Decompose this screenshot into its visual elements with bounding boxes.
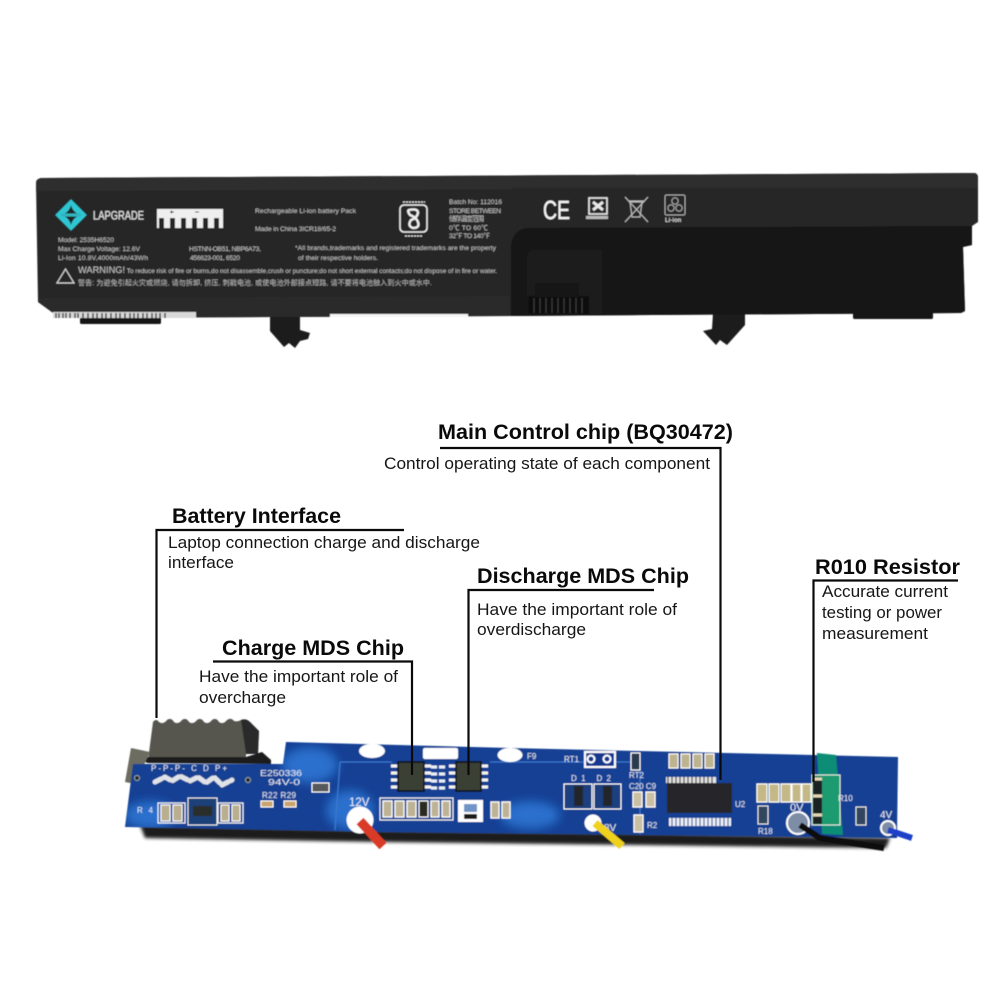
battery pack icon — [157, 209, 223, 228]
capacitor labels: C20 C9 — [629, 782, 657, 791]
storage fahrenheit: 32℉ TO 140℉ — [449, 232, 490, 240]
RT1 pad — [585, 752, 615, 767]
leader line — [468, 590, 654, 775]
RT2 part — [631, 753, 640, 770]
recycling icon — [665, 195, 685, 215]
heading: Charge MDS Chip — [222, 636, 404, 660]
D2 diode — [594, 784, 621, 809]
connector side recess — [241, 719, 259, 754]
description line 3: measurement — [822, 624, 928, 643]
pin labels: P-P-P- C D P+ — [151, 764, 227, 773]
model: Model: 2535H6520 — [58, 237, 114, 244]
R18 resistor — [758, 806, 768, 824]
batch info: Batch No: 112016 — [449, 199, 502, 206]
barcode lines — [56, 313, 165, 318]
label content — [56, 195, 685, 287]
black wire — [800, 825, 884, 848]
U2 main chip — [666, 777, 732, 826]
description: Control operating state of each component — [384, 454, 710, 473]
trace panel — [335, 762, 640, 834]
battery body — [36, 173, 978, 318]
leader line — [156, 530, 404, 718]
resistor R1 — [856, 807, 866, 825]
leader line — [440, 448, 720, 780]
callout: charge chip — [199, 636, 412, 775]
circuit board photo — [124, 719, 912, 848]
origin: Made in China 3ICR18/65-2 — [255, 226, 336, 233]
12V label: 12V — [349, 797, 370, 809]
upper textured band — [36, 173, 978, 191]
board shadow — [140, 825, 890, 848]
tan SMD parts — [261, 783, 329, 807]
component box under chips — [380, 798, 453, 820]
4V pad — [881, 821, 895, 835]
board holes top — [359, 744, 522, 762]
yellow wire — [595, 823, 622, 846]
green resistor stripe — [817, 753, 843, 835]
white strip — [330, 314, 468, 317]
product name: Rechargeable Li-ion battery Pack — [255, 208, 357, 215]
connector pins — [528, 283, 589, 314]
R18 label: R18 — [758, 827, 773, 836]
small component boxes left — [158, 803, 243, 823]
CE mark: CE — [543, 195, 570, 225]
left marking blocks: R4 — [137, 806, 154, 815]
marking R22 R29: R22 R29 — [262, 791, 297, 800]
description: Have the important role of — [199, 667, 398, 686]
component row under chips — [383, 801, 510, 818]
blue wire — [888, 830, 912, 838]
D1 diode — [564, 784, 592, 809]
storage heading: STORE BETWEEN — [449, 208, 501, 215]
U2 label: U2 — [735, 800, 746, 809]
board marking 2: 94V-0 — [268, 778, 301, 787]
8V label: 8V — [604, 823, 617, 834]
trademark notice: *All brands,trademarks and registered trademarks are the property — [295, 245, 497, 252]
heading: Main Control chip (BQ30472) — [438, 420, 733, 444]
R2 label: R2 — [647, 821, 658, 830]
0V pad — [787, 812, 809, 834]
storage heading chinese: 储存温度范围 — [449, 214, 484, 223]
trademark notice 2: of their respective holders. — [298, 255, 378, 262]
mid SMD pads between chips — [431, 767, 445, 788]
battery photo — [36, 173, 978, 348]
description: Accurate current — [822, 582, 948, 601]
description: Laptop connection charge and discharge — [168, 533, 480, 552]
4V label: 4V — [880, 810, 893, 821]
RT2 label: RT2 — [629, 771, 645, 780]
callout: main control chip — [384, 420, 733, 780]
battery connector — [148, 719, 259, 763]
square certification icon — [586, 198, 608, 219]
board marking: E250336 — [260, 769, 303, 778]
transistor — [188, 798, 217, 825]
0V label: 0V — [790, 802, 804, 814]
description line 2: overcharge — [199, 688, 286, 707]
description line 2: interface — [168, 553, 234, 572]
8V pad — [584, 814, 602, 832]
leader line — [213, 662, 412, 775]
heading: Battery Interface — [172, 504, 341, 528]
solder pads row — [155, 776, 232, 785]
connector housing — [527, 250, 602, 315]
callout: R010 resistor — [814, 555, 961, 782]
description: Have the important role of — [477, 600, 677, 619]
connector holes — [134, 776, 250, 782]
Li-Ion label: Li-ion — [665, 218, 682, 224]
heading: R010 Resistor — [815, 555, 961, 579]
board — [125, 742, 898, 838]
description line 2: testing or power — [822, 603, 942, 622]
warning english: WARNING! To reduce risk of fire or burns,do not disassemble,crush or puncture;do not short external contacts;do not dispose of in fire or water. — [78, 265, 497, 275]
small components left — [161, 805, 240, 821]
voltage: Max Charge Voltage: 12.6V — [58, 246, 140, 253]
leader line — [814, 580, 958, 782]
barcode strip — [53, 312, 196, 318]
rubber pad left — [80, 316, 161, 324]
Q1 charge chip — [391, 762, 431, 791]
description line 2: overdischarge — [477, 620, 586, 639]
R010 green resistor — [812, 775, 840, 825]
part numbers 2: 456623-001, 6520 — [190, 255, 240, 262]
warning chinese: 警告: 为避免引起火灾或燃烧, 请勿拆卸, 挤压, 刺戳电池, 或使电池外部接点短路, 请不要将电池触入到火中或水中. — [78, 278, 432, 287]
D labels: D1 D2 — [571, 774, 612, 783]
callout: battery interface — [156, 504, 480, 718]
Fuse label: F9 — [527, 752, 537, 761]
WEEE bin icon — [625, 197, 648, 222]
resistor cluster — [757, 784, 811, 802]
connector dark edge — [131, 752, 271, 764]
R10 label: R10 — [838, 794, 853, 803]
storage celsius: 0℃ TO 60℃ — [449, 224, 488, 232]
brand name: LAPGRADE — [93, 208, 144, 222]
connector side ear — [125, 748, 150, 784]
capacity: Li-Ion 10.8V,4000mAh/43Wh — [58, 255, 148, 262]
Q2 discharge chip — [449, 762, 488, 791]
capacitors — [633, 792, 655, 832]
callout: discharge chip — [468, 564, 689, 775]
lower grip band — [38, 296, 510, 318]
recessed lower right section — [510, 226, 972, 316]
connector pin slots — [534, 298, 582, 313]
dark part in row — [419, 801, 428, 817]
heading: Discharge MDS Chip — [477, 564, 689, 588]
warning triangle — [57, 269, 74, 283]
rubber pad right — [853, 311, 933, 319]
red wire — [360, 821, 383, 846]
top resistor row — [669, 754, 714, 768]
12V pad — [346, 806, 374, 834]
RT1 label: RT1 — [564, 755, 580, 764]
logo diamond — [56, 200, 86, 230]
top right label panel — [512, 188, 968, 234]
part numbers: HSTNN-OB51, NBP6A73, — [189, 246, 261, 253]
bright board patches — [124, 747, 560, 830]
safety mark icon — [400, 202, 427, 236]
mounting tab left — [270, 313, 310, 348]
diode pad — [458, 800, 483, 822]
mounting tab right — [703, 313, 745, 345]
